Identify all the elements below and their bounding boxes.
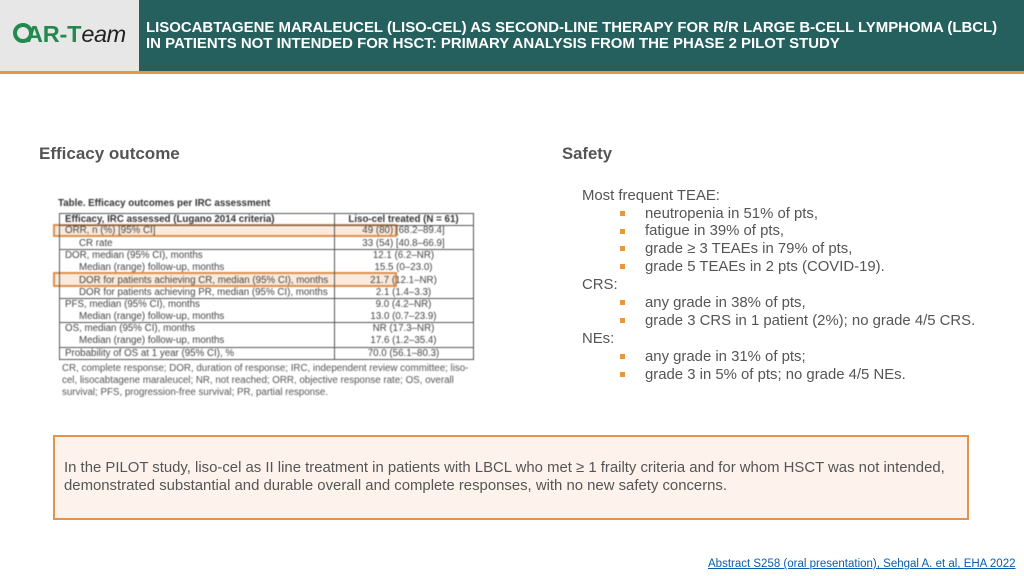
panel: safety list: CRS: bbox=[582, 277, 618, 293]
panel: safety list: grade 5 TEAEs in 2 pts (COVID-19). bbox=[645, 259, 885, 275]
table text: NR (17.3–NR) bbox=[373, 323, 434, 334]
logo text: AR-Team bbox=[26, 21, 126, 47]
table footnote: cel, lisocabtagene maraleucel; NR, not reached; ORR, objective response rate; OS, overall bbox=[62, 375, 454, 386]
table text: Liso-cel treated (N = 61) bbox=[348, 214, 459, 225]
highlight: ORR row bbox=[53, 224, 397, 237]
table text: OS, median (95% CI), months bbox=[65, 323, 195, 334]
conclusion text: In the PILOT study, liso-cel as II line treatment in patients with LBCL who met ≥ 1 frailty criteria and for whom HSCT was not intended, bbox=[64, 460, 945, 476]
panel: safety list: fatigue in 39% of pts, bbox=[645, 223, 784, 239]
table text: PFS, median (95% CI), months bbox=[65, 299, 200, 310]
table text: Probability of OS at 1 year (95% CI), % bbox=[65, 348, 234, 359]
table text: Median (range) follow-up, months bbox=[79, 262, 224, 273]
highlight: DOR CR row bbox=[53, 272, 397, 287]
table text: 2.1 (1.4–3.3) bbox=[376, 287, 431, 298]
table text: Efficacy, IRC assessed (Lugano 2014 criteria) bbox=[65, 214, 275, 225]
table text: 33 (54) [40.8–66.9] bbox=[362, 238, 445, 249]
orange header rule bbox=[0, 71, 1024, 74]
table text: 12.1 (6.2–NR) bbox=[373, 250, 434, 261]
table footnote: survival; PFS, progression-free survival; PR, partial response. bbox=[62, 387, 328, 398]
panel: safety list: any grade in 38% of pts, bbox=[645, 295, 806, 311]
panel: safety list: any grade in 31% of pts; bbox=[645, 349, 806, 365]
conclusion text bbox=[64, 460, 945, 494]
table text: DOR for patients achieving PR, median (95% CI), months bbox=[79, 287, 328, 298]
panel: safety list: grade ≥ 3 TEAEs in 79% of pts, bbox=[645, 241, 852, 257]
panel: safety list: NEs: bbox=[582, 331, 614, 347]
panel: safety list: Most frequent TEAE: bbox=[582, 188, 720, 204]
conclusion text: demonstrated substantial and durable overall and complete responses, with no new safety concerns. bbox=[64, 478, 727, 494]
callout: conclusion bbox=[53, 435, 969, 520]
panel: efficacy table bbox=[52, 198, 475, 398]
panel: safety list: neutropenia in 51% of pts, bbox=[645, 206, 818, 222]
title: LISOCABTAGENE MARALEUCEL (LISO-CEL) AS SECOND-LINE THERAPY FOR R/R LARGE B-CELL LYMPHOMA (LBCL) bbox=[146, 19, 997, 36]
table footnote: CR, complete response; DOR, duration of response; IRC, independent review committee; liso- bbox=[62, 363, 468, 374]
citation link: Abstract S258 (oral presentation), Sehgal A. et al, EHA 2022 bbox=[708, 558, 1016, 570]
table text: 13.0 (0.7–23.9) bbox=[370, 311, 437, 322]
table text: 17.6 (1.2–35.4) bbox=[370, 335, 437, 346]
title: IN PATIENTS NOT INTENDED FOR HSCT: PRIMARY ANALYSIS FROM THE PHASE 2 PILOT STUDY bbox=[146, 35, 840, 52]
logo panel bbox=[0, 0, 139, 71]
table text: ORR, n (%) [95% CI] bbox=[65, 225, 155, 236]
table text: 49 (80) [68.2–89.4] bbox=[362, 225, 445, 236]
panel: safety list bbox=[582, 188, 975, 383]
heading: efficacy outcome: Efficacy outcome bbox=[39, 144, 180, 163]
table text bbox=[64, 214, 459, 359]
table text: CR rate bbox=[79, 238, 113, 249]
panel: safety list: grade 3 CRS in 1 patient (2%); no grade 4/5 CRS. bbox=[645, 313, 975, 329]
heading: safety: Safety bbox=[562, 144, 612, 163]
table text: 9.0 (4.2–NR) bbox=[376, 299, 431, 310]
table text: 15.5 (0–23.0) bbox=[374, 262, 432, 273]
table text: 21.7 (12.1–NR) bbox=[370, 275, 437, 286]
header banner bbox=[0, 0, 1024, 74]
panel: safety list: grade 3 in 5% of pts; no grade 4/5 NEs. bbox=[645, 367, 906, 383]
table text: DOR for patients achieving CR, median (95% CI), months bbox=[79, 275, 328, 286]
title bbox=[146, 19, 997, 52]
table text: DOR, median (95% CI), months bbox=[65, 250, 203, 261]
table caption: Table. Efficacy outcomes per IRC assessment bbox=[58, 198, 270, 209]
table text: 70.0 (56.1–80.3) bbox=[368, 348, 439, 359]
table text: Median (range) follow-up, months bbox=[79, 335, 224, 346]
table footnote bbox=[62, 362, 468, 398]
icon: logo ring bbox=[13, 23, 33, 43]
table text: Median (range) follow-up, months bbox=[79, 311, 224, 322]
